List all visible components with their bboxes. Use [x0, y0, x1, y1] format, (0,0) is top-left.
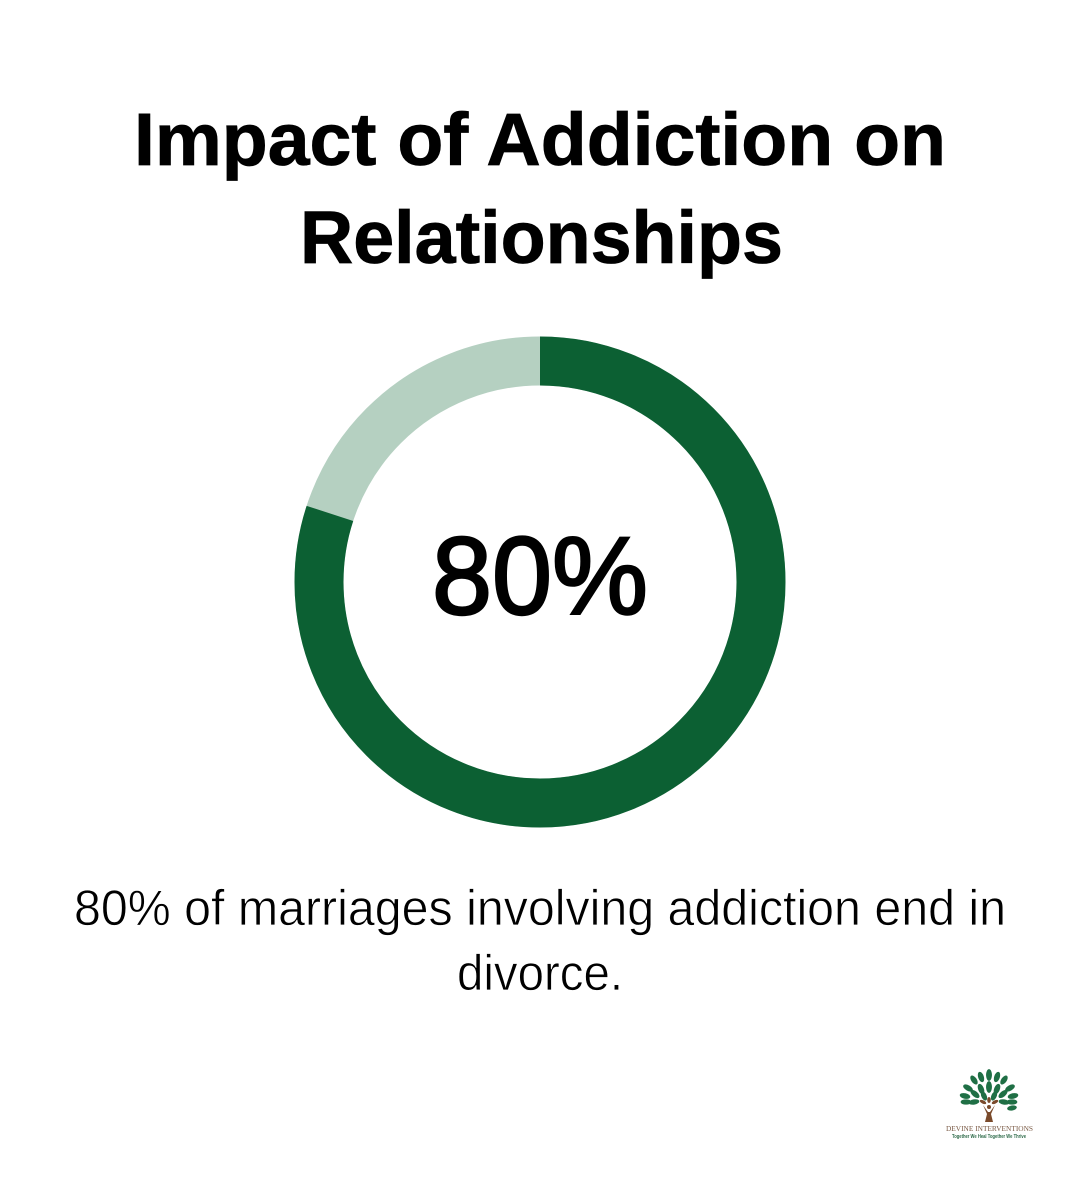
caption: [74, 880, 1006, 1001]
logo: Devine Interventions: [946, 1070, 1033, 1140]
title: [134, 98, 946, 279]
donut chart: 80%: [319, 361, 761, 803]
caption: 80% of marriages involving addiction end in: [74, 880, 1006, 936]
logo tagline: Together We Heal Together We Thrive: [952, 1134, 1026, 1140]
title: Impact of Addiction on: [134, 98, 946, 181]
logo name: DEVINE INTERVENTIONS: [946, 1125, 1033, 1133]
caption: divorce.: [457, 945, 623, 1001]
icon: tree leaves: [960, 1070, 1018, 1111]
icon: trunk figure: [979, 1097, 999, 1122]
donut value: 80%: [432, 515, 648, 638]
title: Relationships: [300, 196, 783, 279]
